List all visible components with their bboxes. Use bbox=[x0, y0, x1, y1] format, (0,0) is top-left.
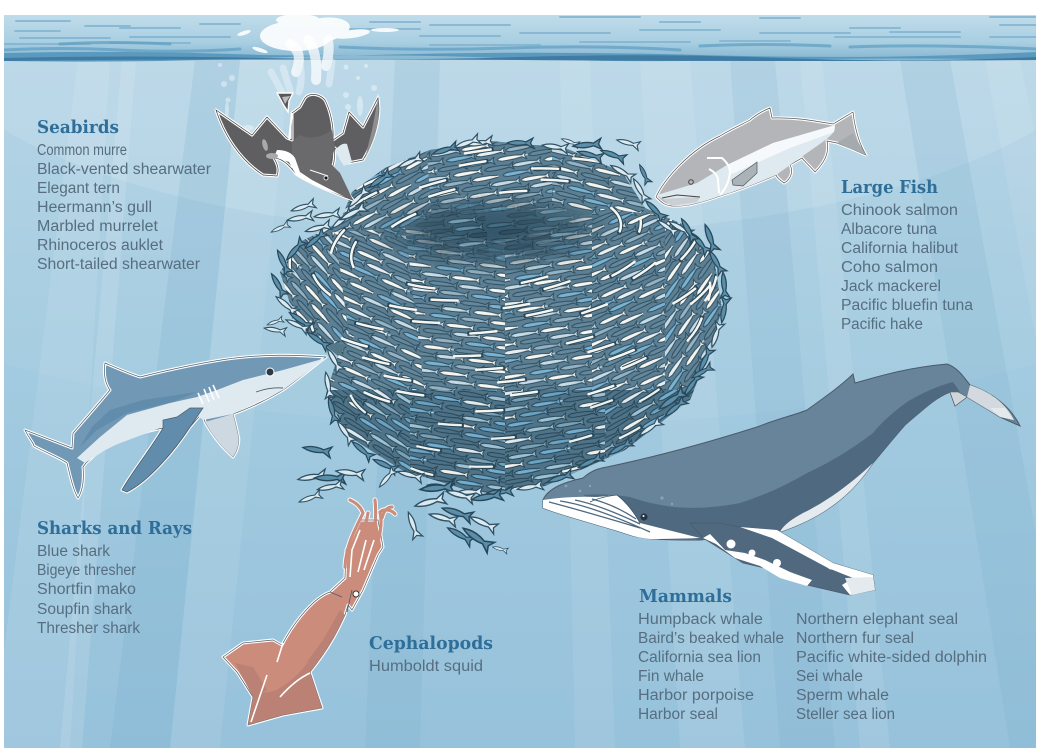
icon: humpback whale bbox=[543, 364, 1020, 595]
list: large fish: Chinook salmon bbox=[841, 202, 958, 219]
fish along the edge of the school bbox=[267, 136, 731, 498]
stray fish around the school bbox=[263, 134, 720, 554]
list: mammals column one: Harbor seal bbox=[638, 706, 718, 723]
list: seabirds: Marbled murrelet bbox=[37, 218, 159, 235]
list: mammals column two bbox=[796, 611, 987, 723]
list: mammals column one bbox=[638, 611, 784, 723]
fish school (bait ball) bbox=[260, 118, 760, 554]
heading: Large Fish: Large Fish bbox=[841, 177, 938, 198]
list: seabirds: Black-vented shearwater bbox=[37, 161, 211, 178]
splash bbox=[218, 14, 399, 131]
heading: Mammals: Mammals bbox=[639, 586, 732, 607]
list: mammals column two: Sei whale bbox=[796, 668, 863, 685]
list: cephalopods: Humboldt squid bbox=[369, 658, 483, 675]
icon: chinook salmon bbox=[656, 108, 866, 206]
list: large fish: Coho salmon bbox=[841, 259, 938, 276]
list: mammals column two: Sperm whale bbox=[796, 687, 889, 704]
list: seabirds: Elegant tern bbox=[37, 180, 120, 197]
list: seabirds: Rhinoceros auklet bbox=[37, 237, 164, 254]
icon: blue shark bbox=[25, 355, 326, 498]
list: large fish bbox=[841, 202, 973, 333]
icon: humboldt squid bbox=[223, 500, 395, 725]
list: sharks and rays: Blue shark bbox=[37, 543, 110, 560]
list: large fish: Albacore tuna bbox=[841, 221, 937, 238]
heading: Cephalopods: Cephalopods bbox=[369, 633, 493, 654]
list: large fish: Jack mackerel bbox=[841, 278, 941, 295]
list: sharks and rays: Bigeye thresher bbox=[37, 562, 136, 579]
flipper bbox=[690, 523, 875, 595]
list: mammals column two: Steller sea lion bbox=[796, 706, 895, 723]
list: mammals column one: California sea lion bbox=[638, 649, 761, 666]
list: seabirds: Common murre bbox=[37, 142, 127, 159]
list: mammals column two: Pacific white-sided dolphin bbox=[796, 649, 987, 666]
list: seabirds bbox=[37, 142, 211, 273]
list: large fish: Pacific bluefin tuna bbox=[841, 297, 973, 314]
heading: Seabirds: Seabirds bbox=[37, 117, 119, 138]
heading: Sharks and Rays: Sharks and Rays bbox=[37, 518, 192, 539]
water surface bbox=[4, 15, 1036, 62]
list: large fish: Pacific hake bbox=[841, 316, 923, 333]
list: sharks and rays bbox=[37, 543, 140, 637]
icon: diving seabird bbox=[216, 93, 379, 200]
list: large fish: California halibut bbox=[841, 240, 959, 257]
list: mammals column one: Fin whale bbox=[638, 668, 704, 685]
list: mammals column two: Northern elephant seal bbox=[796, 611, 958, 628]
list: mammals column one: Baird’s beaked whale bbox=[638, 630, 784, 647]
list: mammals column one: Humpback whale bbox=[638, 611, 763, 628]
list: mammals column one: Harbor porpoise bbox=[638, 687, 754, 704]
list: sharks and rays: Shortfin mako bbox=[37, 581, 136, 598]
list: seabirds: Short-tailed shearwater bbox=[37, 256, 200, 273]
list: sharks and rays: Thresher shark bbox=[37, 620, 140, 637]
list: sharks and rays: Soupfin shark bbox=[37, 601, 132, 618]
list: mammals column two: Northern fur seal bbox=[796, 630, 914, 647]
list: seabirds: Heermann’s gull bbox=[37, 199, 152, 216]
